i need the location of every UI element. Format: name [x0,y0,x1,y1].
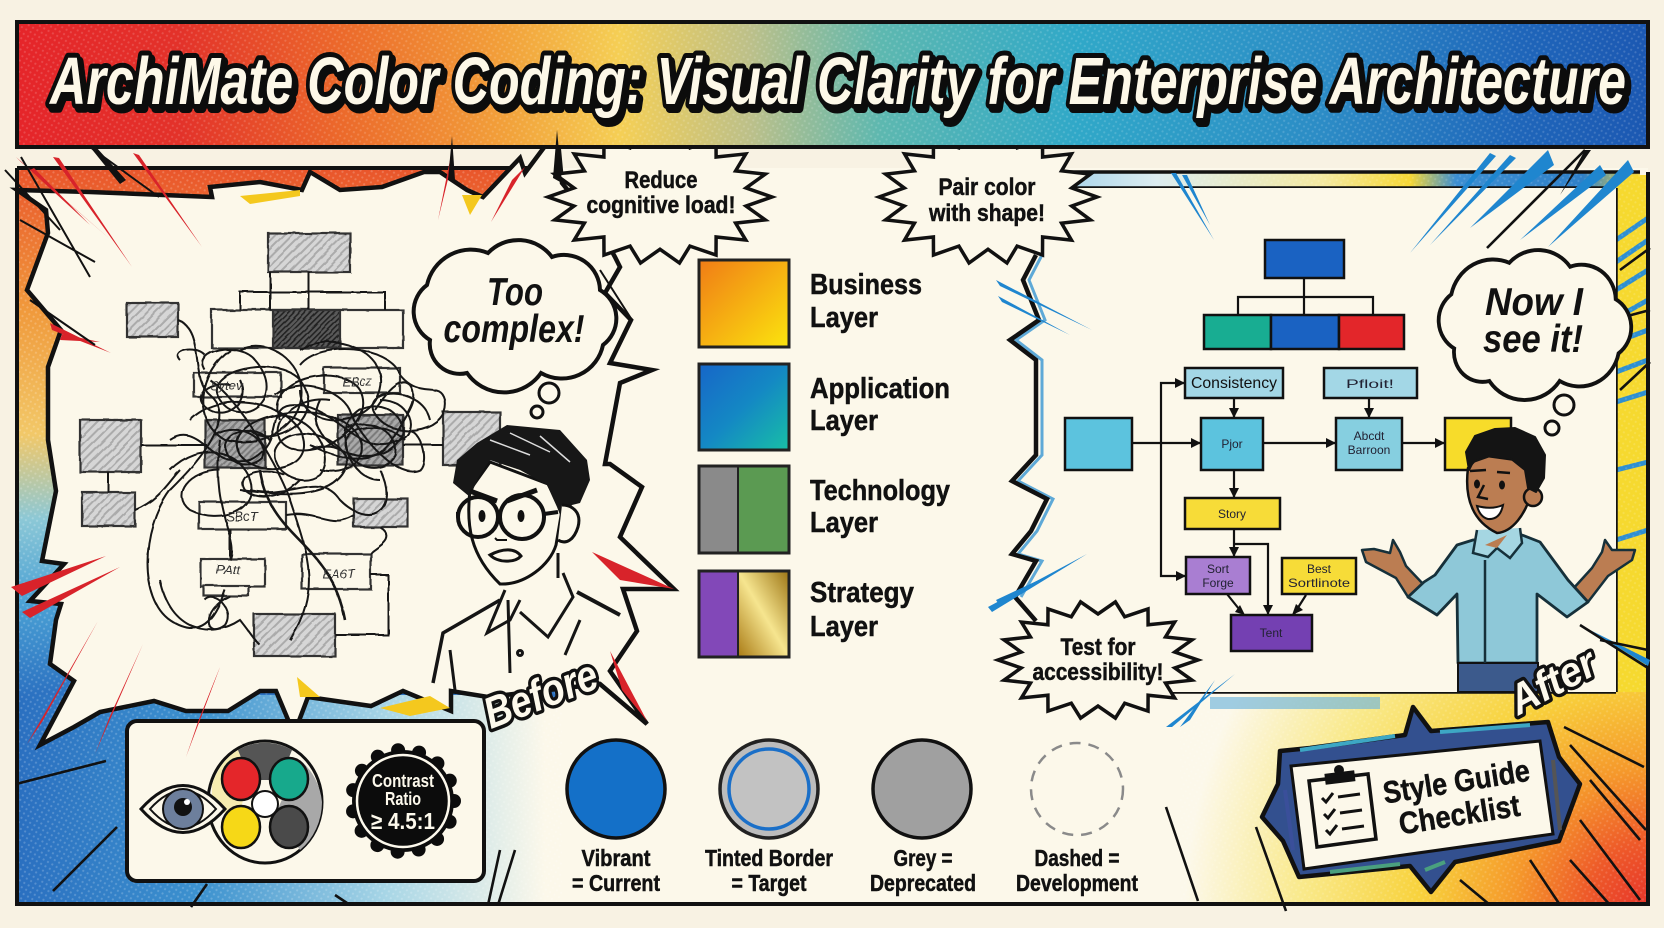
burst callout: test for accessibility: accessibility! [1032,659,1164,686]
coloured after diagram [1065,240,1511,651]
swatch: business layer [699,260,922,347]
connectors [1132,278,1445,615]
character: happy person [1362,428,1635,692]
burst callout: reduce cognitive load: cognitive load! [586,192,736,219]
sketch box labels: EA6T [322,566,356,581]
spikes overlapping banner [90,130,1591,195]
status: dashed development: Development [1016,870,1138,896]
badge: style guide checklist [1262,707,1580,892]
swatch: strategy layer: Strategy [810,577,914,609]
badge: style guide checklist: Style Guide [1381,753,1532,810]
sketch box labels: Sytev [210,378,244,393]
box labels: Barroon [1348,443,1390,457]
swatch: business layer: Business [810,269,922,301]
status: tinted border target [705,740,833,896]
badge: contrast ratio: Contrast [372,771,434,791]
arrowheads [1175,378,1445,615]
box labels: Best [1307,562,1332,576]
legend: architecture layers [699,260,950,657]
badge: style guide checklist: Checklist [1396,788,1522,841]
sketch box labels: PAtt [216,562,241,577]
swatch: business layer: Layer [810,302,878,334]
after panel jagged edge [1010,255,1053,621]
status: grey deprecated: Grey = [894,845,952,871]
box labels: Forge [1202,576,1234,590]
box labels: Pjor [1221,437,1243,451]
status: grey deprecated: Deprecated [870,870,976,896]
swatch: application layer: Layer [810,405,878,437]
thought bubble: now I see it: see it! [1483,318,1583,361]
panel: before burst background [17,130,674,745]
icon: clipboard checklist [1309,765,1376,847]
thought bubble: too complex: complex! [444,308,585,351]
swatch: technology layer: Technology [810,475,950,507]
status: vibrant current: Vibrant [582,845,651,871]
burst callout: test for accessibility [998,602,1198,718]
box labels [1191,375,1394,640]
red spike over box [186,667,220,757]
sketch box labels [210,374,373,581]
burst callout: pair color with shape [879,131,1097,263]
burst callout: test for accessibility: Test for [1060,634,1136,661]
boxes [1065,240,1511,651]
box labels: Consistency [1191,375,1277,392]
box labels: Sort [1207,562,1230,576]
burst callout: reduce cognitive load [548,131,772,263]
status: tinted border target: = Target [732,870,807,896]
box labels: Tent [1260,626,1283,640]
box labels: Sortlinote [1288,576,1350,590]
label: after: After [1500,638,1606,724]
sketch box labels: SBcT [226,509,259,524]
swatch: technology layer: Layer [810,507,878,539]
thought bubble: now I see it: Now I [1485,281,1584,324]
box labels: Abcdt [1354,429,1385,443]
swatch: application layer [699,364,950,450]
thought bubble: now I see it [1439,250,1631,435]
box labels: Pfloit! [1346,377,1394,391]
panel: accessibility box [127,667,484,881]
sketch box labels: EBcz [342,374,373,389]
burst callout: reduce cognitive load: Reduce [624,167,698,194]
swatch: technology layer [699,466,950,553]
icon: colour wheel [208,741,322,863]
status: grey deprecated [870,740,976,896]
status: tinted border target: Tinted Border [705,845,833,871]
sketch boxes [80,233,500,656]
title banner [17,22,1648,147]
character: frustrated person [433,425,620,690]
tangled connector lines [108,272,445,645]
status: vibrant current [567,740,665,896]
burst callout: pair color with shape: with shape! [928,200,1045,227]
swatch: application layer: Application [810,373,950,405]
sketch diagram: tangled before architecture [80,233,500,656]
status: dashed development [1016,743,1138,896]
burst callout: pair color with shape: Pair color [938,174,1036,201]
swatch: strategy layer: Layer [810,611,878,643]
right panel colour field [1065,172,1648,904]
badge: contrast ratio [352,750,454,852]
shirt [1408,535,1588,663]
thought bubble: too complex: Too [487,271,543,314]
swatch: strategy layer [699,571,914,657]
frame interior [17,168,1648,904]
status: vibrant current: = Current [572,870,660,896]
head [1467,455,1532,533]
legend: lifecycle status [567,740,1138,896]
box labels: Story [1218,507,1246,521]
badge: contrast ratio: ≥ 4.5:1 [371,808,435,834]
label: before: Before [477,650,605,738]
frame borders [17,168,1648,904]
icon: eye [141,786,225,832]
forearms and hands [1362,540,1424,597]
thought bubble: too complex [414,240,616,418]
red action spikes: before panel [5,140,674,757]
status: dashed development: Dashed = [1034,845,1120,871]
badge: contrast ratio: Ratio [385,789,421,809]
panel: after background [1010,188,1616,692]
left panel colour field [17,168,562,904]
